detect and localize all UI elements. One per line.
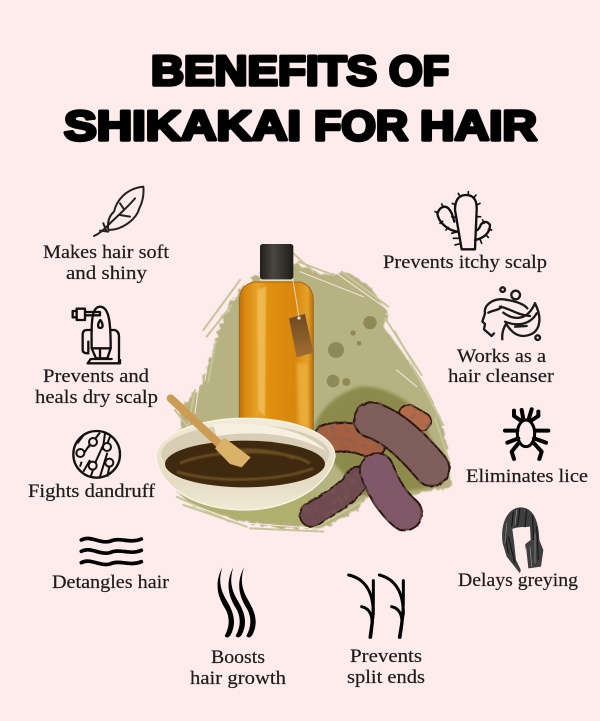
- item: split ends: [347, 575, 425, 688]
- item: split ends: Prevents: [350, 647, 422, 667]
- icon: scalp dropper: [73, 307, 120, 363]
- bottle: [239, 244, 313, 430]
- item: dandruff: Fights dandruff: [28, 482, 156, 502]
- item: dandruff: [28, 431, 156, 502]
- icon: split hair: [349, 575, 403, 637]
- icon: cactus: [435, 192, 492, 249]
- item: hair growth: hair growth: [190, 669, 286, 689]
- icon: dandruff circle: [73, 431, 120, 478]
- item: makes hair soft: Makes hair soft: [43, 243, 170, 263]
- icon: three hair strands: [218, 567, 256, 637]
- bottle tag: [289, 278, 313, 357]
- bowl of shikakai paste: [156, 398, 335, 510]
- title: [64, 47, 537, 149]
- item: hair growth: [190, 567, 286, 689]
- icon: feather: [94, 187, 143, 236]
- item: itchy scalp: Prevents itchy scalp: [383, 253, 547, 273]
- icon: wig: [502, 507, 543, 573]
- wooden spoon: [171, 398, 251, 467]
- title: FOR: [314, 102, 408, 149]
- item: hair cleanser: hair cleanser: [448, 367, 554, 387]
- title: OF: [389, 47, 449, 94]
- title: BENEFITS: [151, 47, 377, 94]
- icon: woman with flowing hair: [482, 287, 540, 340]
- item: greying: Delays greying: [458, 571, 578, 591]
- title: SHIKAKAI: [64, 102, 301, 149]
- item: greying: [458, 507, 578, 591]
- item: dry scalp: Prevents and: [43, 367, 150, 387]
- title: HAIR: [420, 102, 537, 149]
- item: dry scalp: heals dry scalp: [35, 388, 158, 408]
- item: itchy scalp: [383, 192, 547, 273]
- item: hair cleanser: [448, 287, 554, 387]
- olive brush backdrop: [175, 253, 452, 532]
- item: dry scalp: [35, 307, 158, 408]
- item: makes hair soft: [43, 187, 170, 284]
- central illustration: shikakai bottle, bowl and pods: [156, 244, 452, 532]
- icon: louse: [505, 409, 548, 459]
- item: detangles: Detangles hair: [52, 573, 169, 593]
- item: lice: [466, 409, 588, 487]
- item: split ends: split ends: [347, 668, 425, 688]
- pods: [312, 414, 432, 515]
- icon: waves: [81, 538, 141, 565]
- item: makes hair soft: and shiny: [66, 264, 148, 284]
- item: detangles: [52, 538, 169, 593]
- item: hair cleanser: Works as a: [457, 347, 546, 367]
- item: lice: Eliminates lice: [466, 467, 588, 487]
- item: hair growth: Boosts: [211, 648, 265, 668]
